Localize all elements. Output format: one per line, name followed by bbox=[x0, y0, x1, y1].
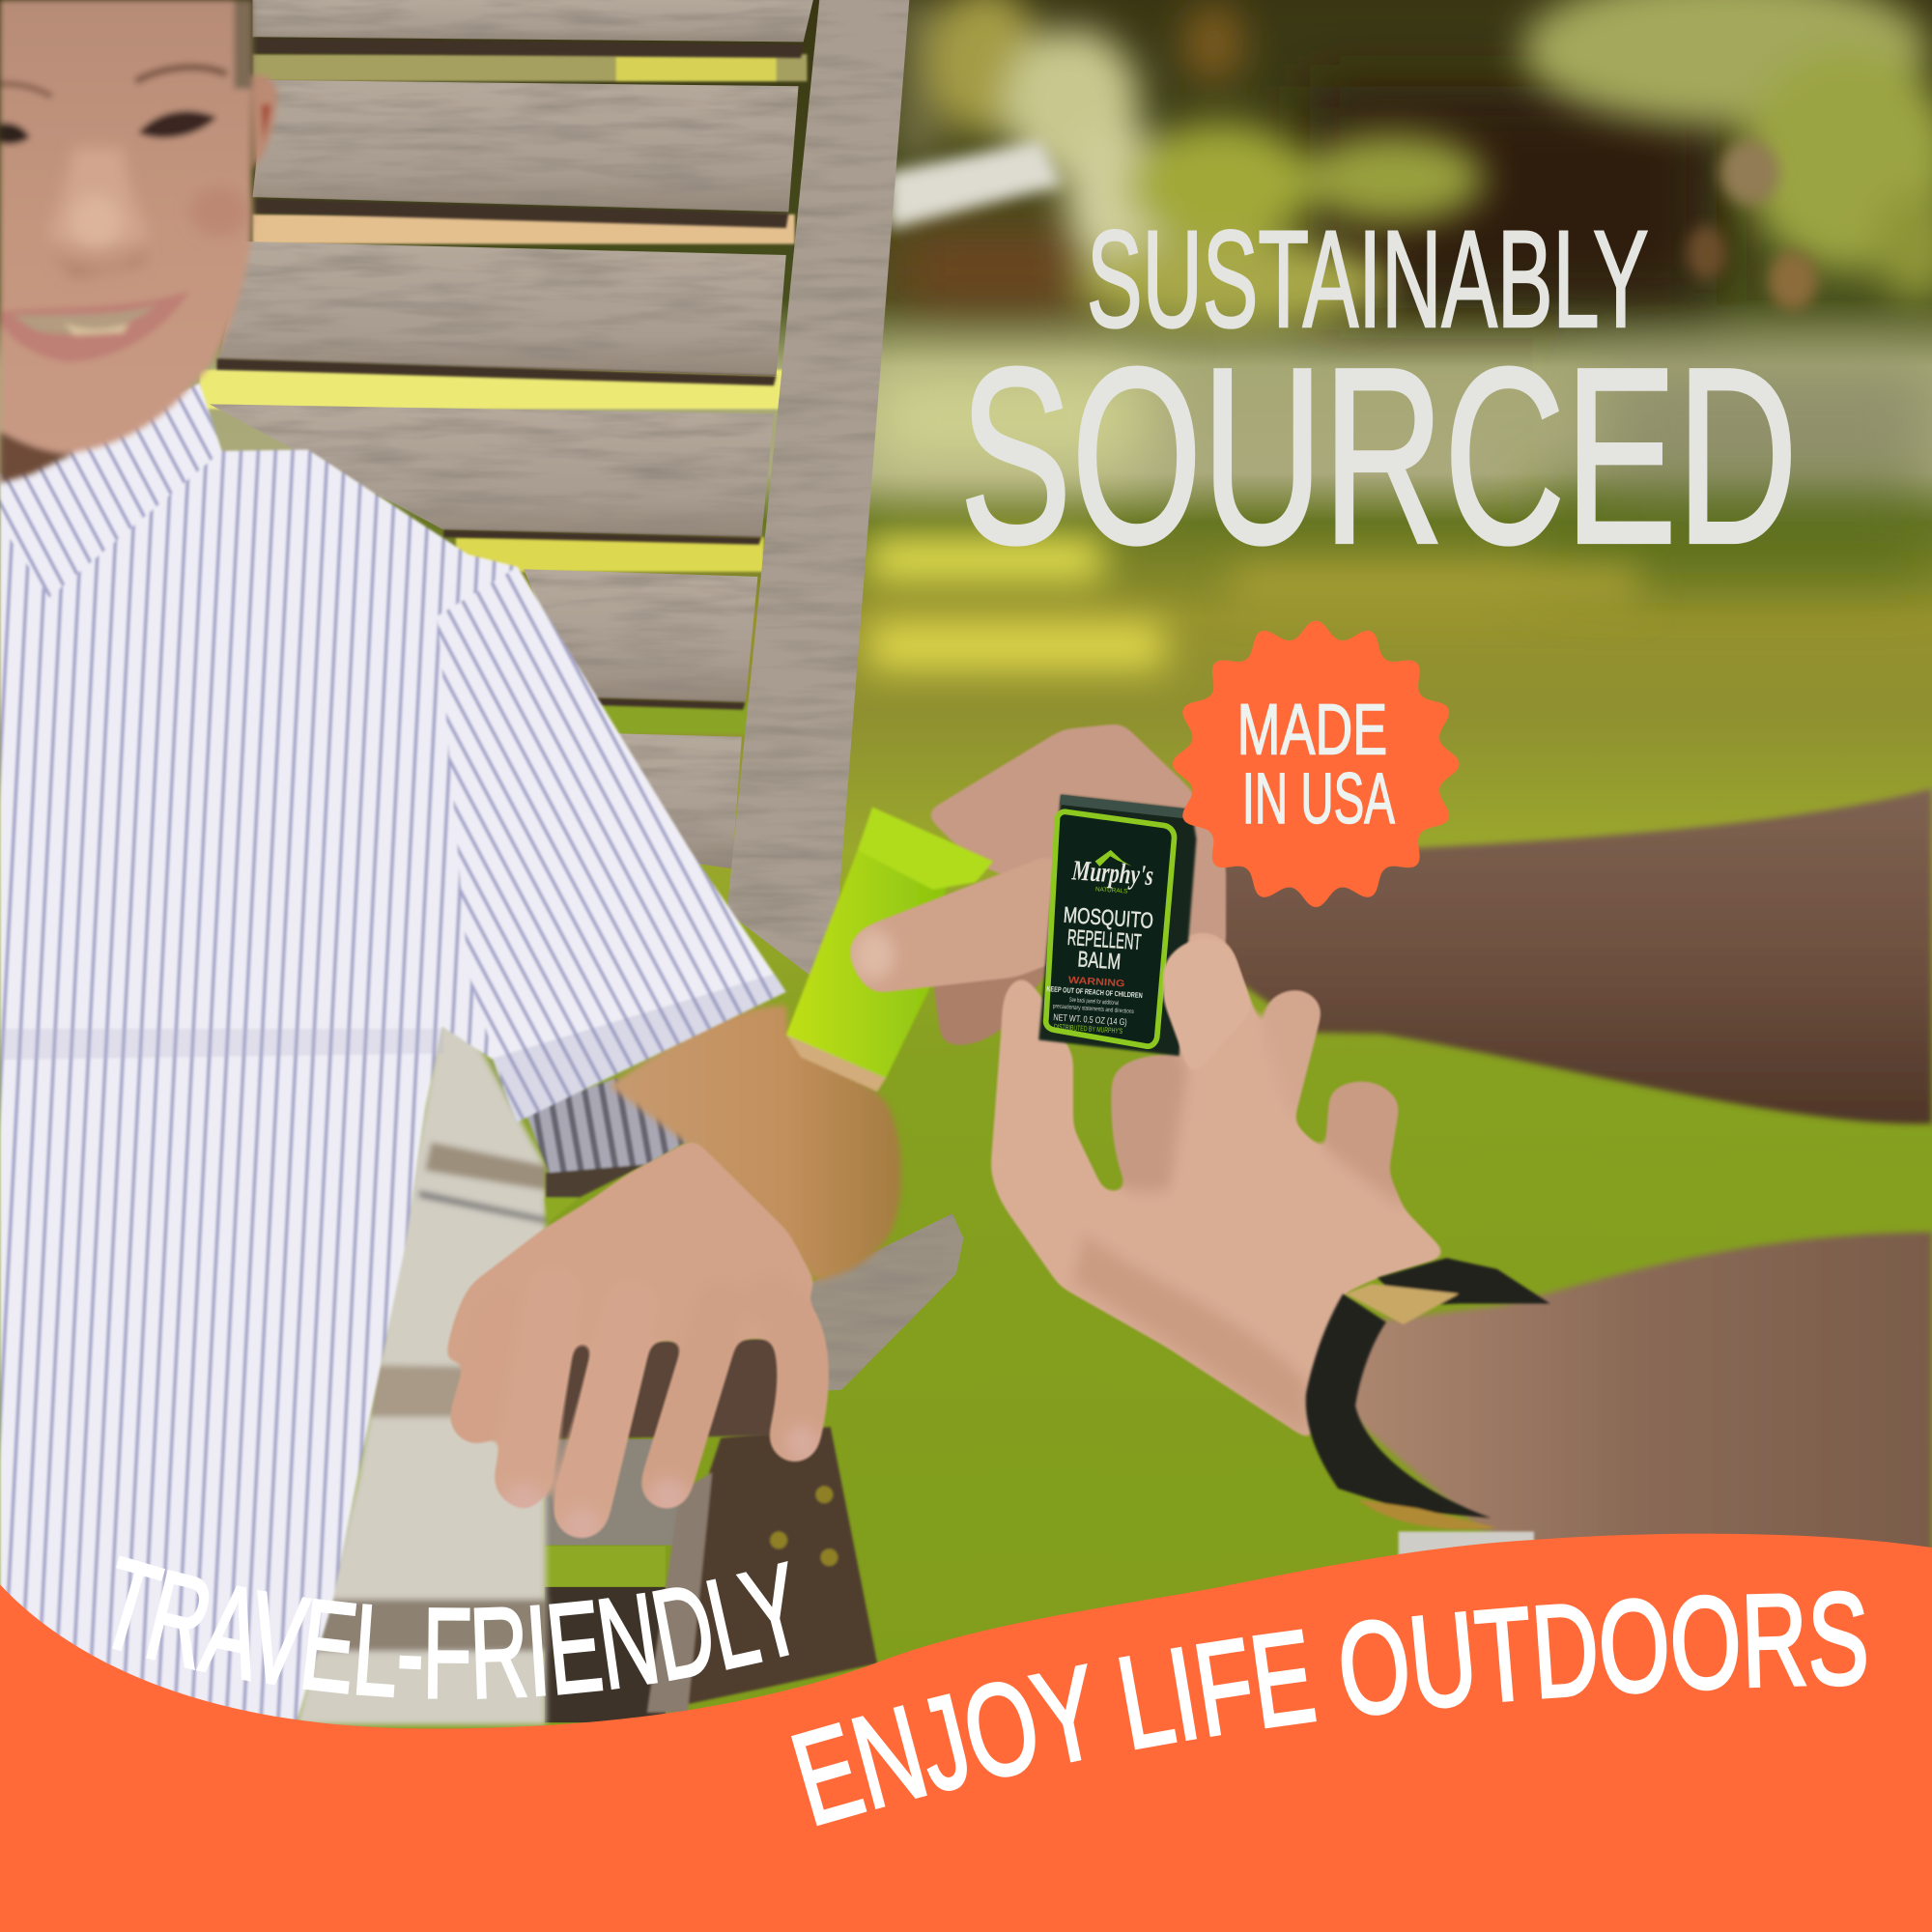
chair under-arm back bbox=[545, 1439, 680, 1545]
product box: Mosquito Repellent Balm bbox=[1038, 795, 1197, 1056]
boy forearm and elbow bbox=[609, 1006, 901, 1282]
adult upper forearm bbox=[1182, 788, 1932, 1123]
lower hand behind-thumb finger bbox=[1265, 989, 1322, 1122]
striped back cushion bbox=[296, 985, 549, 1725]
box logo: DISTRIBUTED BY MURPHY'S bbox=[1054, 1022, 1123, 1036]
orange wave band bbox=[0, 1534, 1932, 1932]
boy hair bbox=[234, 0, 252, 89]
boy nose and cheek shading bbox=[49, 148, 249, 277]
adult lower hand bbox=[991, 932, 1449, 1444]
shirt sleeve underside shadow bbox=[524, 1078, 690, 1222]
wooden chair bbox=[200, 0, 963, 1722]
chair legs bbox=[647, 1427, 877, 1713]
thumb nail bbox=[1171, 956, 1226, 1012]
lower hand palm and thumb bbox=[991, 932, 1449, 1444]
box logo: NATURALS bbox=[1095, 886, 1128, 895]
box logo: REPELLENT bbox=[1066, 924, 1142, 954]
boy shirt bbox=[0, 384, 786, 1725]
badge text: MADE bbox=[1237, 690, 1387, 770]
boy bbox=[0, 0, 901, 1725]
chair background gaps bbox=[200, 54, 807, 734]
box logo: Murphy's bbox=[1070, 855, 1154, 892]
box logo: KEEP OUT OF REACH OF CHILDREN bbox=[1046, 984, 1143, 1000]
boy head and neck bbox=[0, 0, 277, 483]
box logo: BALM bbox=[1077, 946, 1122, 974]
boy collar bbox=[0, 384, 222, 598]
boy hand bbox=[444, 1139, 815, 1538]
chair arm rest bbox=[788, 1213, 963, 1392]
distant white bar bbox=[887, 140, 1062, 229]
thumb over product box bbox=[1163, 938, 1253, 1078]
heading bbox=[960, 203, 1798, 595]
bokeh spots bbox=[1687, 140, 1817, 310]
adult lower forearm bbox=[1343, 1233, 1932, 1555]
chair vertical post bbox=[727, 0, 909, 992]
box product name: MOSQUITO bbox=[1063, 901, 1154, 933]
chair slat shadows bbox=[216, 39, 804, 710]
box warning: WARNING bbox=[1067, 975, 1125, 990]
lower hand middle finger bbox=[1111, 1054, 1188, 1195]
blurred foliage bbox=[868, 0, 1932, 669]
box logo: precautionary statements and directions bbox=[1053, 1003, 1134, 1015]
made in USA starburst badge bbox=[1166, 613, 1466, 914]
lower hand far finger bbox=[1325, 1081, 1406, 1213]
boy mouth bbox=[0, 291, 189, 361]
adult upper hand index finger bbox=[849, 853, 1065, 993]
chair arm front bbox=[554, 1338, 790, 1439]
box logo: See back panel for additional bbox=[1069, 997, 1119, 1007]
label: travel-friendly: TRAVEL-FRIENDLY bbox=[112, 1555, 789, 1699]
palm crease bbox=[1072, 1233, 1309, 1435]
made in USA starburst badge: IN USA bbox=[1242, 758, 1395, 838]
boy sleeve bbox=[438, 567, 786, 1122]
upper hand back fingers bbox=[924, 724, 1226, 1045]
wrist watch bbox=[1306, 1258, 1550, 1556]
box logo bbox=[1043, 846, 1158, 1037]
boy eyes bbox=[138, 111, 216, 138]
lime green product tube bbox=[786, 807, 993, 1092]
chair slats bbox=[210, 0, 813, 868]
label: enjoy life outdoors: ENJOY LIFE OUTDOORS bbox=[791, 1590, 1866, 1826]
box logo: NET WT. 0.5 OZ (14 G) bbox=[1053, 1012, 1127, 1028]
boy ear bbox=[251, 75, 277, 169]
box lime border bbox=[1046, 811, 1175, 1046]
